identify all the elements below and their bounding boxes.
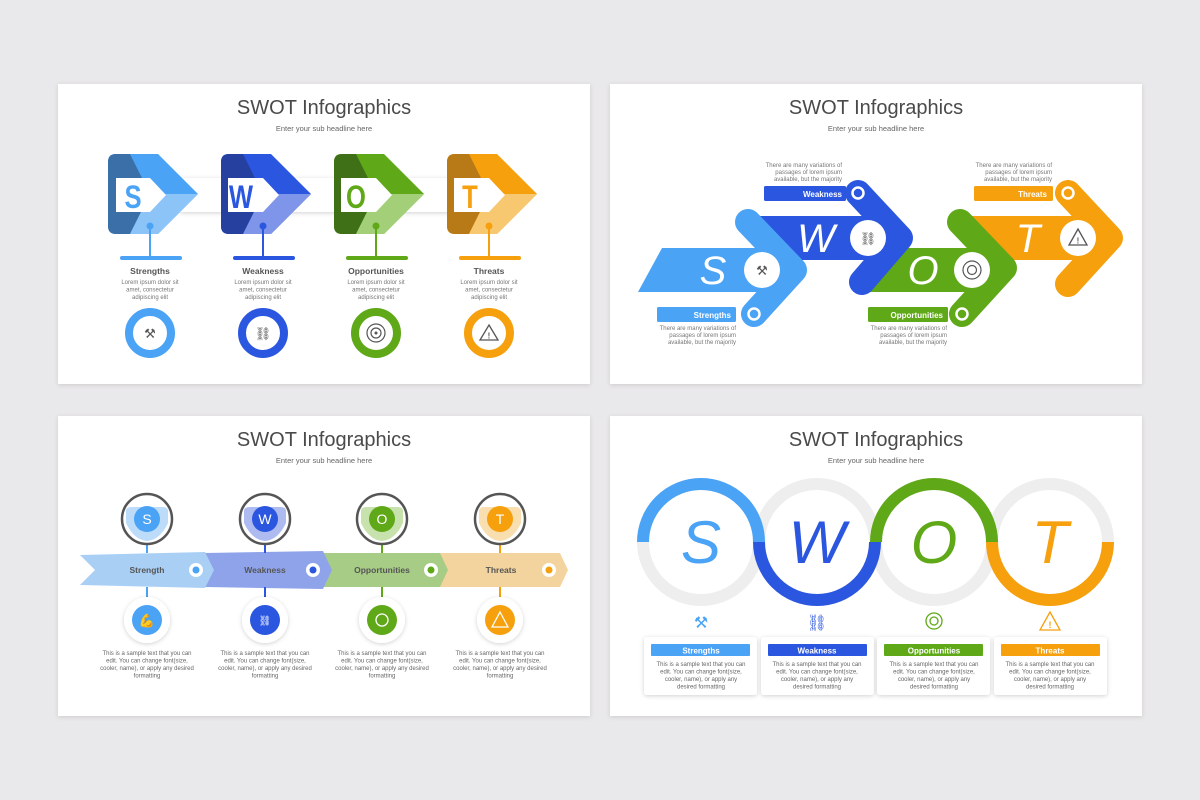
card: Strengths: Strengths — [682, 646, 720, 656]
arrow head T — [1062, 188, 1110, 284]
subtitle: Enter your sub headline here — [828, 456, 924, 465]
node W: ⛓ — [259, 615, 271, 627]
rings — [643, 484, 1108, 600]
node S: formatting — [134, 674, 160, 680]
panel: slide 4 rings — [610, 416, 1142, 716]
letters: T — [1016, 217, 1043, 261]
label: Opportunities: There are many variations of — [871, 326, 947, 332]
ribbon: Strength — [130, 565, 164, 575]
item: Threats: adipiscing elit — [471, 295, 507, 301]
card: Strengths: This is a sample text that you can — [656, 662, 746, 668]
label: Strengths: Strengths — [694, 311, 732, 320]
card: Weakness: edit. You can change font(size, — [776, 670, 858, 676]
item: Threats: ! — [488, 332, 490, 340]
node O: cooler, name), or apply any desired — [335, 666, 429, 672]
title: SWOT Infographics — [237, 97, 411, 119]
title: SWOT Infographics — [237, 429, 411, 451]
label: Opportunities — [868, 307, 948, 346]
card: Weakness — [761, 614, 874, 695]
arrow bands — [638, 216, 1095, 292]
card: Weakness: Weakness — [798, 646, 837, 656]
chevron O — [334, 154, 424, 234]
node O: This is a sample text that you can — [337, 651, 427, 657]
arrow head S — [748, 222, 794, 320]
node O — [335, 494, 429, 680]
title: SWOT Infographics — [789, 97, 963, 119]
item: Opportunities — [346, 222, 408, 354]
label: Strengths: passages of lorem ipsum — [669, 333, 736, 339]
node S — [100, 494, 194, 680]
node T: This is a sample text that you can — [455, 651, 545, 657]
ribbon: Threats — [486, 565, 517, 575]
panel: slide 2 arrows — [610, 84, 1142, 384]
label: Opportunities: Opportunities — [891, 311, 944, 320]
arrow head W — [852, 188, 900, 282]
item: Strengths: Strengths — [130, 266, 170, 276]
label: Strengths: available, but the majority — [668, 340, 736, 346]
ring letters: O — [911, 509, 957, 576]
node W — [218, 494, 312, 680]
card: Weakness: This is a sample text that you can — [772, 662, 862, 668]
label: Threats: available, but the majority — [984, 177, 1052, 183]
card: Opportunities — [877, 613, 990, 695]
panel: slide 1 chevrons — [58, 84, 590, 384]
node W: formatting — [252, 674, 278, 680]
chevron T: T — [462, 180, 478, 216]
card: Strengths — [644, 615, 757, 695]
node T: formatting — [487, 674, 513, 680]
label: Strengths: There are many variations of — [660, 326, 736, 332]
letters: W — [797, 217, 838, 261]
card: Opportunities: cooler, name), or apply any — [898, 677, 970, 683]
card: Threats: Threats — [1036, 646, 1065, 656]
card: Opportunities: This is a sample text that you can — [889, 662, 979, 668]
card: Opportunities: desired formatting — [910, 684, 958, 690]
node T — [453, 494, 547, 680]
label: Opportunities: passages of lorem ipsum — [880, 333, 947, 339]
node S: 💪 — [139, 613, 155, 628]
card: Strengths: desired formatting — [677, 684, 725, 690]
item: Threats: Threats — [474, 266, 505, 276]
node W: cooler, name), or apply any desired — [218, 666, 312, 672]
icon circles: ! — [1077, 236, 1079, 246]
card: Threats: ! — [1048, 620, 1052, 630]
label: Threats: There are many variations of — [976, 163, 1052, 169]
node T: edit. You can change font(size, — [459, 658, 541, 664]
node W: edit. You can change font(size, — [224, 658, 306, 664]
item: Strengths — [120, 222, 182, 354]
node S: cooler, name), or apply any desired — [100, 666, 194, 672]
icon circles: ⚒ — [756, 263, 768, 278]
node T: T — [496, 511, 505, 527]
item: Strengths: Lorem ipsum dolor sit — [121, 280, 179, 286]
node S: S — [142, 511, 152, 527]
ring letters — [681, 509, 1073, 576]
item: Weakness — [233, 222, 295, 354]
chevron W — [221, 154, 311, 234]
item: Weakness: ⛓ — [255, 326, 271, 341]
chevron S — [108, 154, 198, 234]
ring letters: W — [789, 509, 851, 576]
panel: slide 3 ribbon — [58, 416, 590, 716]
item: Threats — [459, 222, 521, 354]
label: Weakness: available, but the majority — [774, 177, 842, 183]
label: Weakness: There are many variations of — [766, 163, 842, 169]
node T: cooler, name), or apply any desired — [453, 666, 547, 672]
ring letters: S — [681, 509, 721, 576]
card: Weakness: cooler, name), or apply any — [781, 677, 853, 683]
item: Threats: amet, consectetur — [465, 288, 513, 294]
ribbon — [80, 551, 568, 589]
item: Weakness: Lorem ipsum dolor sit — [234, 280, 292, 286]
label: Threats — [974, 163, 1053, 201]
item: Weakness: adipiscing elit — [245, 295, 281, 301]
card: Threats: edit. You can change font(size, — [1009, 670, 1091, 676]
card: Threats — [994, 612, 1107, 695]
card: Threats: This is a sample text that you can — [1005, 662, 1095, 668]
ribbon: Opportunities — [354, 565, 410, 575]
item: Threats: Lorem ipsum dolor sit — [460, 280, 518, 286]
node S: edit. You can change font(size, — [106, 658, 188, 664]
card: Opportunities: edit. You can change font(size, — [893, 670, 975, 676]
ring letters: T — [1032, 509, 1073, 576]
subtitle: Enter your sub headline here — [276, 124, 372, 133]
card: Threats: desired formatting — [1026, 684, 1074, 690]
chevron W: W — [229, 180, 254, 216]
item: Weakness: Weakness — [242, 266, 284, 276]
item: Opportunities: adipiscing elit — [358, 295, 394, 301]
node O: O — [377, 511, 388, 527]
node S: This is a sample text that you can — [102, 651, 192, 657]
node W: W — [258, 511, 272, 527]
item: Opportunities: amet, consectetur — [352, 288, 400, 294]
title: SWOT Infographics — [789, 429, 963, 451]
subtitle: Enter your sub headline here — [276, 456, 372, 465]
card: Strengths: edit. You can change font(size, — [660, 670, 742, 676]
arrow head O — [956, 222, 1004, 320]
letters: O — [907, 249, 939, 293]
label: Weakness — [764, 163, 846, 201]
chevron O: O — [346, 180, 366, 216]
icon circles: ⛓ — [860, 231, 876, 246]
subtitle: Enter your sub headline here — [828, 124, 924, 133]
label: Threats: Threats — [1018, 190, 1048, 199]
item: Weakness: amet, consectetur — [239, 288, 287, 294]
card: Weakness: desired formatting — [793, 684, 841, 690]
card: Opportunities: Opportunities — [908, 646, 961, 656]
label: Threats: passages of lorem ipsum — [985, 170, 1052, 176]
letters — [700, 217, 1043, 293]
card: Strengths: cooler, name), or apply any — [665, 677, 737, 683]
card: Strengths: ⚒ — [694, 615, 708, 632]
ribbon: Weakness — [244, 565, 286, 575]
label: Weakness: Weakness — [803, 190, 843, 199]
item: Opportunities: Opportunities — [348, 266, 404, 276]
white band — [180, 178, 510, 212]
item: Opportunities: Lorem ipsum dolor sit — [347, 280, 405, 286]
label: Strengths — [657, 307, 736, 346]
icon circles — [744, 220, 1096, 288]
item: Strengths: amet, consectetur — [126, 288, 174, 294]
chevron T — [447, 154, 537, 234]
letters: S — [700, 249, 727, 293]
card: Weakness: ⛓ — [807, 614, 827, 632]
label: Weakness: passages of lorem ipsum — [775, 170, 842, 176]
node O: edit. You can change font(size, — [341, 658, 423, 664]
label: Opportunities: available, but the majority — [879, 340, 947, 346]
chevron S: S — [124, 180, 142, 216]
node W: This is a sample text that you can — [220, 651, 310, 657]
node O: formatting — [369, 674, 395, 680]
item: Strengths: ⚒ — [144, 326, 156, 341]
card: Threats: cooler, name), or apply any — [1014, 677, 1086, 683]
item: Strengths: adipiscing elit — [132, 295, 168, 301]
